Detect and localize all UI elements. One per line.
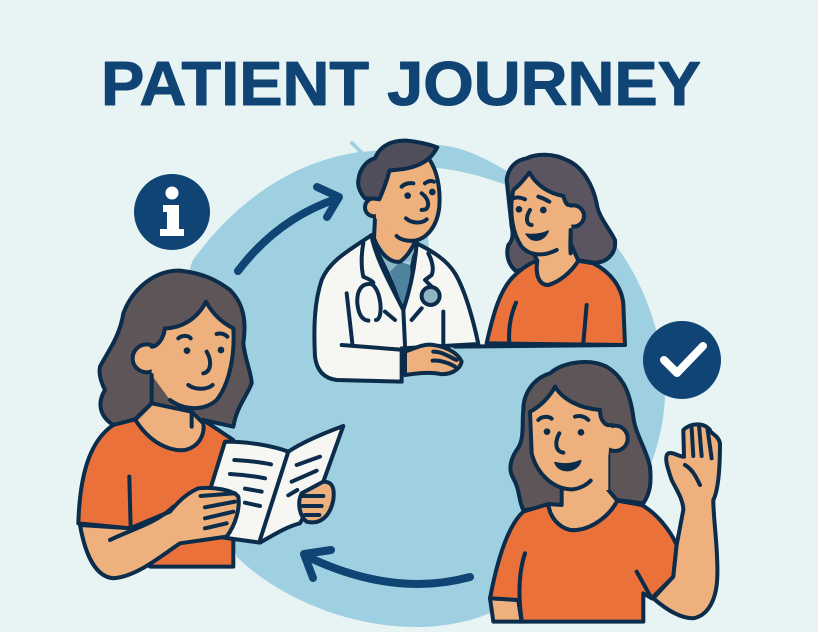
icon: information xyxy=(134,174,210,250)
scene: doctor and patient consultation xyxy=(314,141,625,382)
arrow: information to doctor xyxy=(238,187,339,271)
patient reading a leaflet xyxy=(78,271,343,578)
consulting patient xyxy=(487,155,625,345)
doctor xyxy=(314,141,478,382)
icon: check mark xyxy=(643,321,721,399)
arrow: waving patient to reading patient xyxy=(304,550,470,584)
background circle xyxy=(186,143,665,627)
title: PATIENT JOURNEY xyxy=(101,50,701,119)
table edge xyxy=(455,345,625,347)
patient waving xyxy=(490,362,720,622)
